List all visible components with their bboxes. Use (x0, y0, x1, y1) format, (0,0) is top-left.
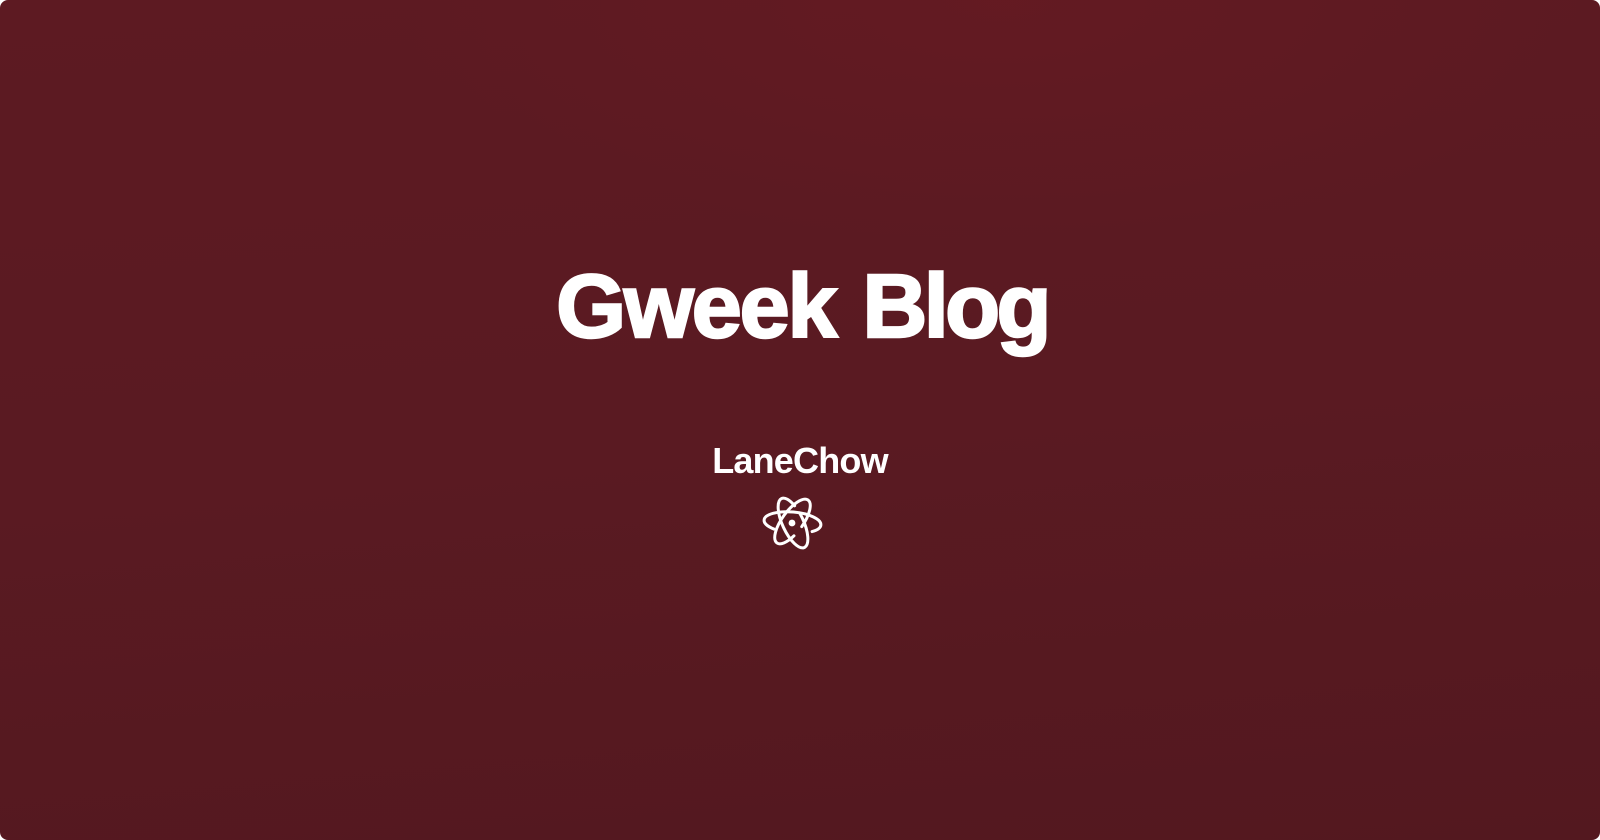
author name: LaneChow (712, 440, 888, 481)
title: Gweek Blog (556, 257, 1048, 357)
icon: atom logo (762, 496, 822, 550)
